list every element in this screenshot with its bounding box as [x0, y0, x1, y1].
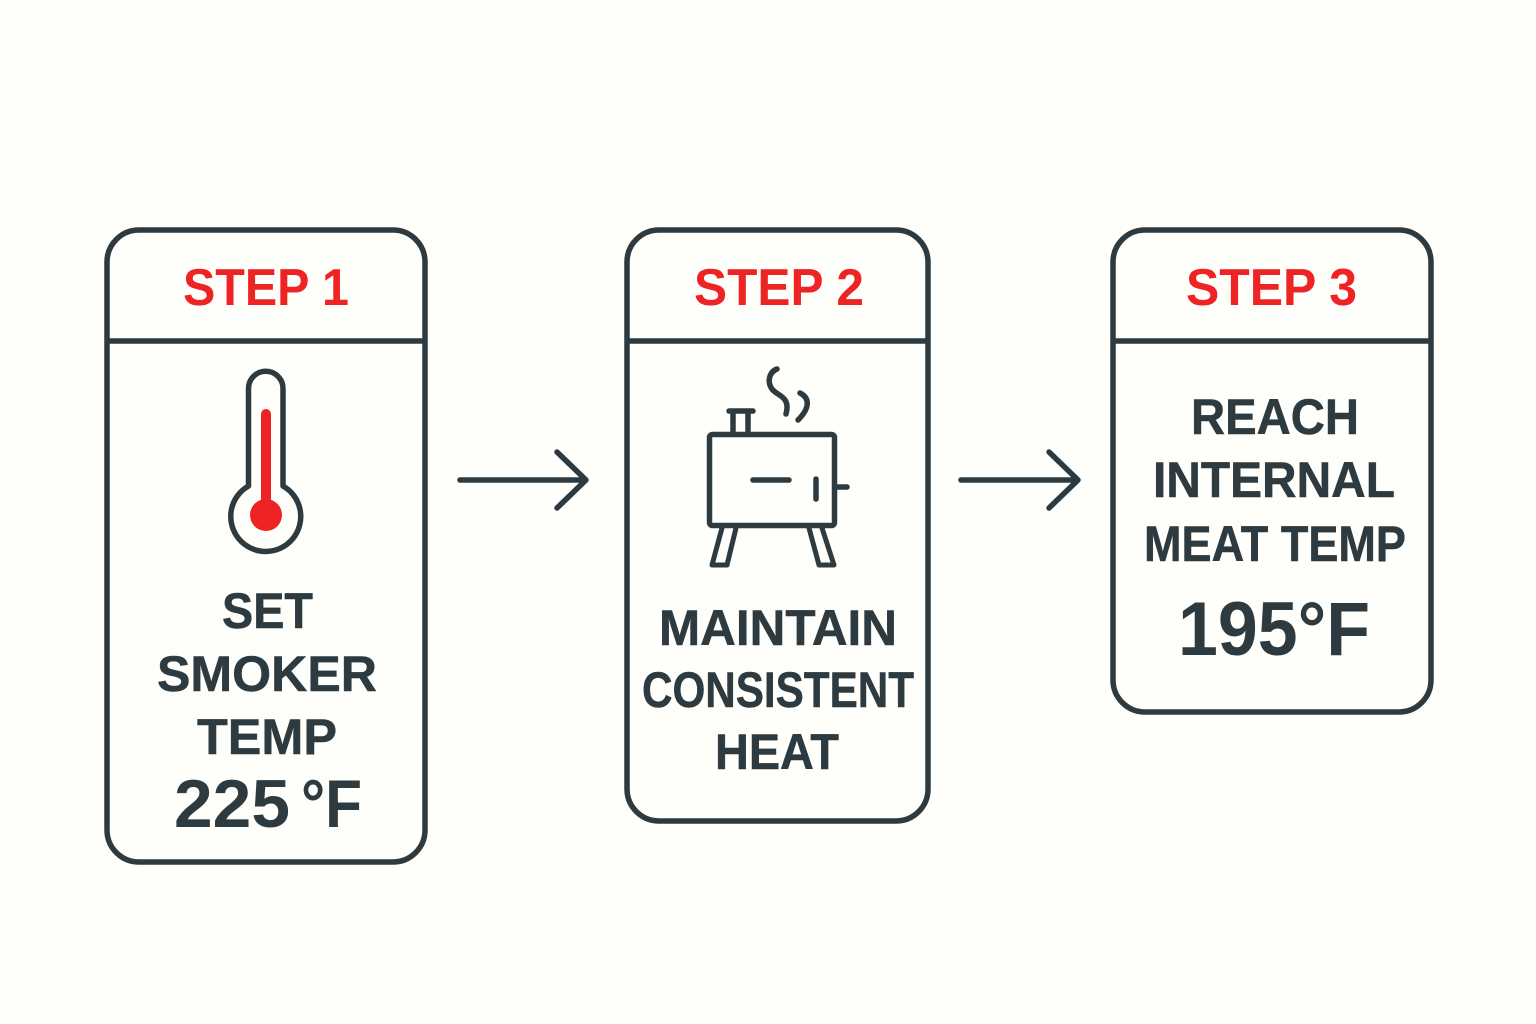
text: maintain consistent heat: MAINTAIN	[659, 600, 897, 656]
card outline: step 3	[1113, 230, 1431, 712]
text: maintain consistent heat	[642, 600, 914, 780]
panel: step 3	[1113, 230, 1431, 712]
value: 225 °F	[174, 766, 362, 842]
arrow: step 1 to step 2	[460, 452, 586, 508]
icon: thermometer	[231, 371, 301, 551]
card outline: step 2	[627, 230, 928, 821]
heading: step 3: STEP 3	[1186, 259, 1357, 317]
text: reach internal meat temp: MEAT TEMP	[1144, 516, 1406, 572]
text: reach internal meat temp	[1144, 389, 1406, 572]
text: reach internal meat temp: INTERNAL	[1153, 452, 1395, 508]
heading: step 2: STEP 2	[694, 259, 864, 317]
card outline: step 1	[107, 230, 425, 862]
text: set smoker temp: SMOKER	[157, 646, 377, 702]
value: 225 °F: °F	[301, 766, 362, 842]
panel: step 1	[107, 230, 425, 862]
heading: step 1: STEP 1	[183, 259, 349, 317]
text: set smoker temp: TEMP	[197, 709, 337, 765]
text: set smoker temp	[157, 583, 377, 765]
text: maintain consistent heat: HEAT	[715, 724, 839, 780]
arrow: step 2 to step 3	[961, 452, 1078, 508]
panel: step 2	[627, 230, 928, 821]
value: 195 °F: 195°F	[1178, 587, 1370, 672]
icon: smoker	[710, 369, 847, 565]
value: 225 °F: 225	[174, 766, 290, 842]
text: reach internal meat temp: REACH	[1191, 389, 1359, 445]
text: maintain consistent heat: CONSISTENT	[642, 662, 914, 718]
text: set smoker temp: SET	[222, 583, 313, 639]
